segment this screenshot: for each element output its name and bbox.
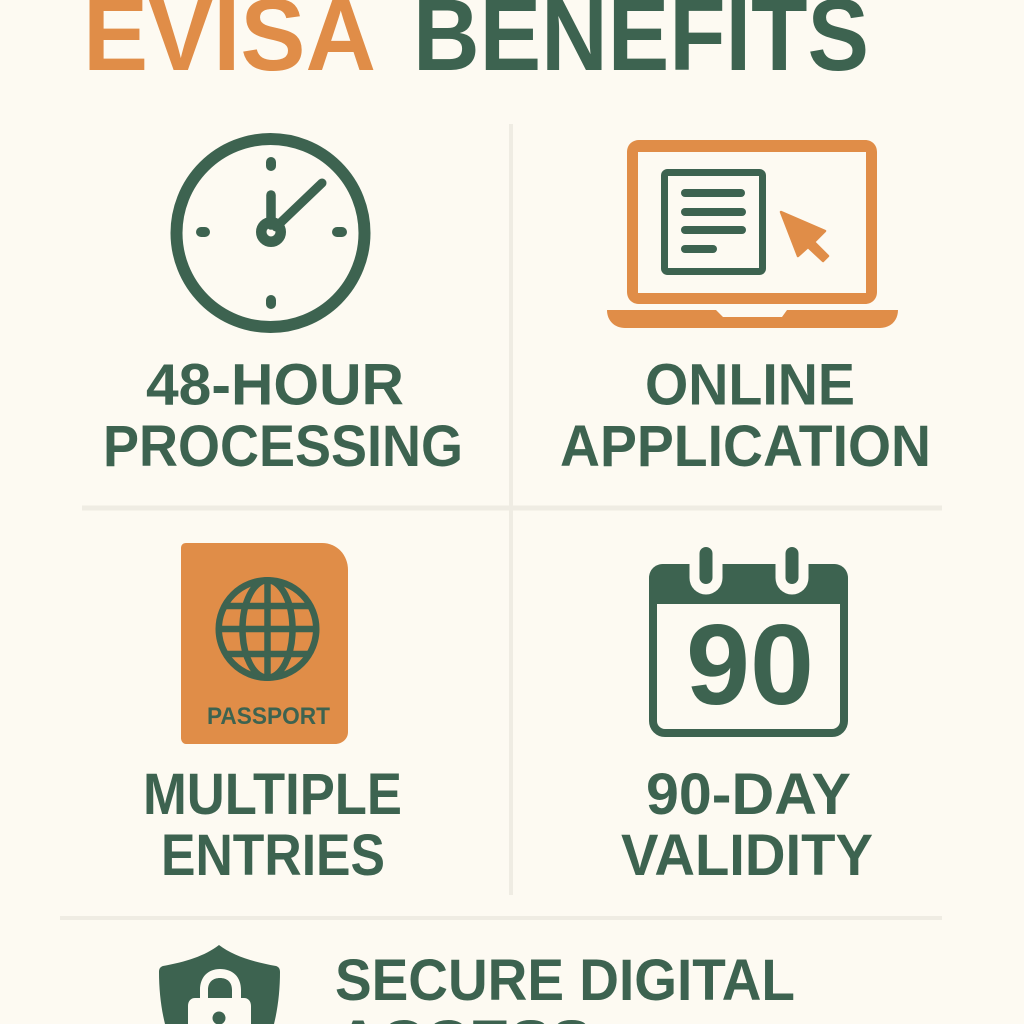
icon: clock bbox=[176, 139, 364, 327]
label: multiple entries: ENTRIES bbox=[161, 823, 385, 888]
label: multiple entries: MULTIPLE bbox=[143, 762, 402, 827]
title bbox=[83, 0, 869, 92]
icon: calendar bbox=[649, 554, 848, 733]
label: 90-day validity: 90-DAY bbox=[646, 762, 851, 827]
icon: calendar: 90 bbox=[686, 602, 814, 729]
label: 48-hour processing bbox=[103, 352, 463, 479]
label: 48-hour processing: PROCESSING bbox=[103, 414, 463, 479]
label: 90-day validity: VALIDITY bbox=[621, 823, 873, 888]
panel: 48-hour processing bbox=[103, 139, 463, 479]
panel: multiple entries bbox=[143, 543, 402, 888]
icon: shield with padlock bbox=[159, 945, 280, 1024]
label: 48-hour processing: 48-HOUR bbox=[146, 352, 404, 418]
label: online application: ONLINE bbox=[645, 352, 855, 418]
label: 90-day validity bbox=[621, 762, 873, 888]
label: online application bbox=[560, 352, 931, 479]
icon: passport bbox=[181, 543, 348, 744]
panel: 90-day validity bbox=[621, 554, 873, 888]
label: online application: APPLICATION bbox=[560, 414, 931, 479]
icon: passport: PASSPORT bbox=[207, 703, 330, 730]
panel: online application bbox=[560, 140, 931, 479]
panel: secure digital access bbox=[159, 945, 795, 1024]
icon: laptop with form and cursor bbox=[607, 140, 898, 328]
label: secure digital access: SECURE DIGITAL bbox=[335, 948, 795, 1013]
label: multiple entries bbox=[143, 762, 402, 888]
